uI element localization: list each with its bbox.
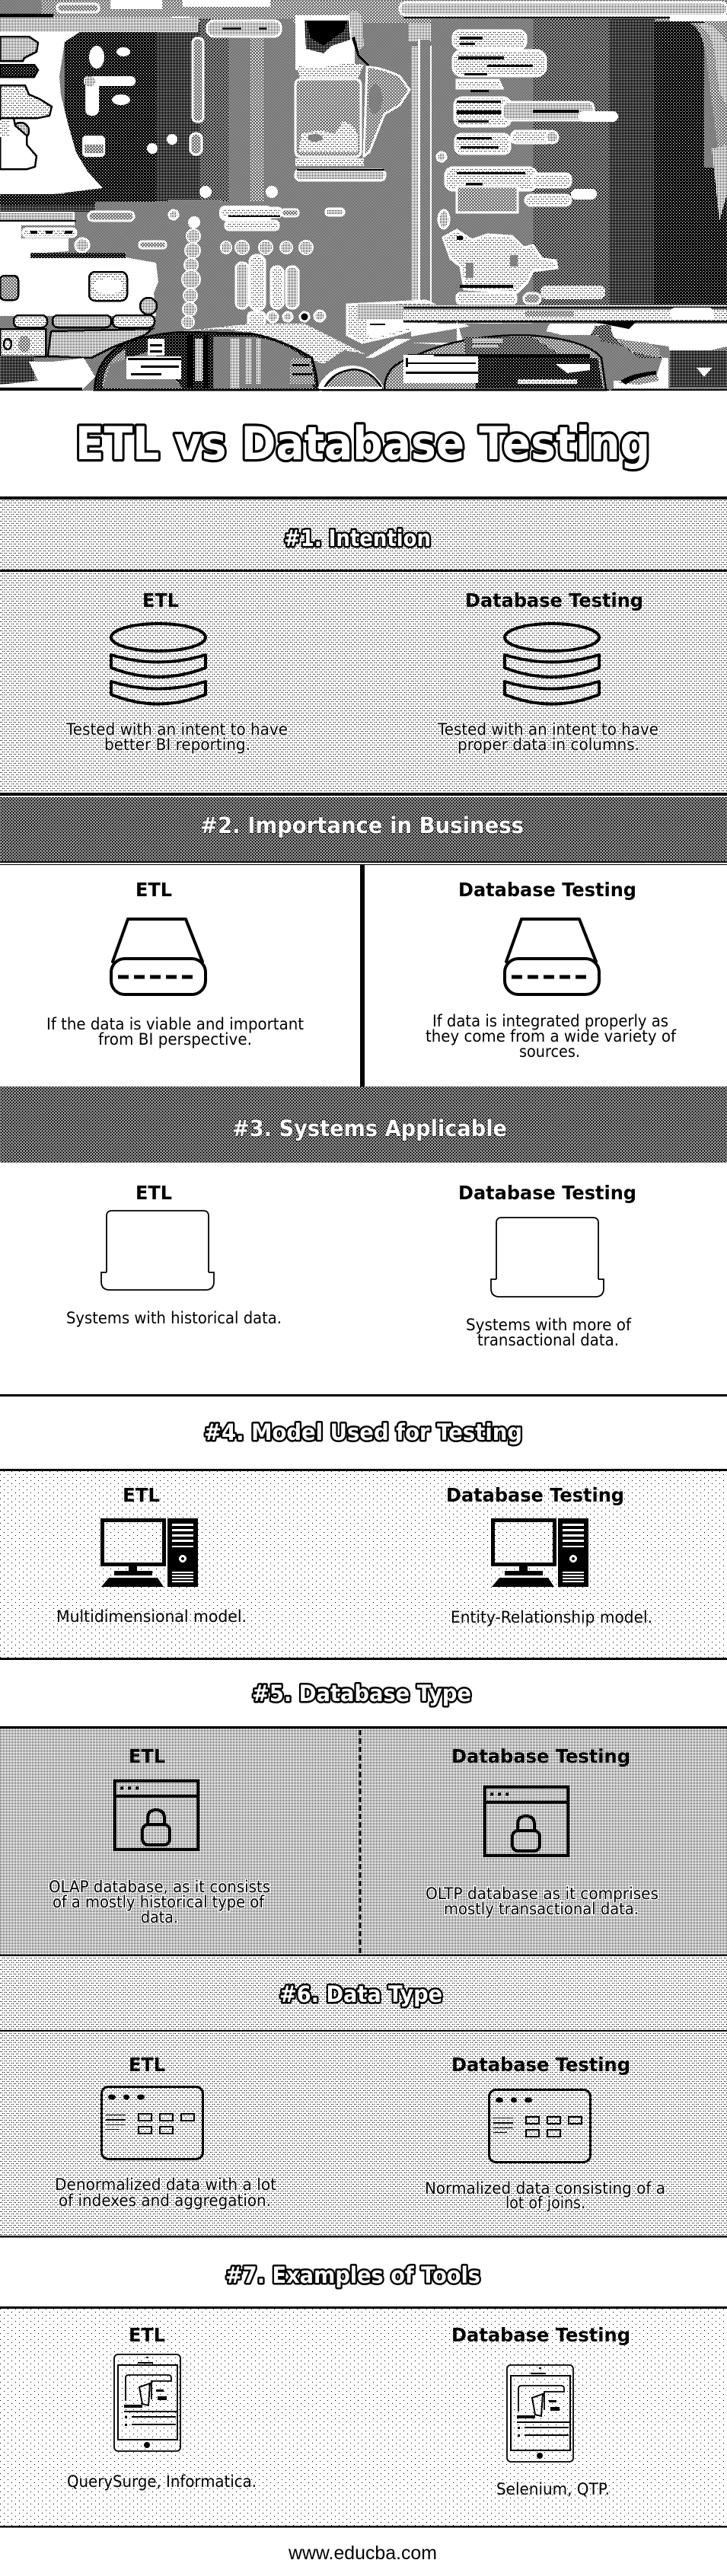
ETL column heading: ETL [129,2054,165,2076]
DB text [426,1885,658,1918]
heading: #7. Examples of Tools [225,2262,480,2288]
ETL column heading: ETL [136,879,172,901]
Database Testing column heading: Database Testing [446,1484,624,1506]
Database Testing column heading: Database Testing [451,2054,630,2076]
ETL text: If the data is viable and important [46,1015,304,1033]
DB text: Selenium, QTP. [496,2480,610,2498]
hero photo: circuit board [0,0,727,391]
DB text: Tested with an intent to have [437,720,658,739]
icon: desktop computer ETL [101,1518,198,1587]
DB text: If data is integrated properly as [432,1012,668,1030]
DB text: sources. [519,1042,580,1061]
icon: drive DB [505,919,599,994]
icon: tablet ETL [114,2354,180,2451]
Database Testing column heading: Database Testing [458,879,636,901]
footer url: www.educba.com [288,2542,437,2564]
ETL column heading: ETL [129,2324,165,2346]
icon: laptop ETL [101,1211,214,1290]
DB text [437,720,658,754]
panel: section 6 data type [0,1955,727,2236]
icon: tablet DB [507,2365,573,2462]
column divider [359,1730,361,1955]
heading: #5. Database Type [252,1681,471,1706]
heading: #4. Model Used for Testing [204,1419,522,1445]
icon: lock window ETL [115,1781,198,1850]
Database Testing column heading: Database Testing [451,1745,630,1767]
ETL text: from BI perspective. [98,1030,252,1049]
column divider [360,865,365,1087]
heading: #3. Systems Applicable [232,1116,507,1141]
heading: #1. Intention [284,525,431,551]
Database Testing column heading: Database Testing [458,1182,636,1204]
DB text: mostly transactional data. [444,1900,639,1918]
icon: database ETL [111,624,206,704]
ETL text: QuerySurge, Informatica. [67,2472,257,2491]
ETL text [49,1878,270,1926]
ETL text: OLAP database, as it consists [49,1878,270,1896]
icon: lock window DB [485,1787,568,1856]
panel: section 3 systems applicable [0,1087,727,1349]
panel: section 5 database type [0,1658,727,1955]
ETL text: Denormalized data with a lot [55,2175,276,2194]
DB text: Systems with more of [466,1316,632,1334]
ETL text: Multidimensional model. [56,1607,247,1626]
ETL column heading: ETL [136,1182,172,1204]
icon: browser ETL [102,2086,202,2159]
heading: #2. Importance in Business [200,812,524,838]
panel: section 2 importance in business [0,793,727,1087]
Database Testing column heading: Database Testing [451,2324,630,2346]
ETL text [65,720,288,754]
ETL column heading: ETL [142,589,179,611]
ETL column heading: ETL [123,1484,160,1506]
ETL text: Systems with historical data. [66,1309,282,1327]
DB text: Entity-Relationship model. [451,1608,652,1626]
panel: section 7 examples of tools [0,2236,727,2528]
icon: desktop computer DB [492,1518,588,1587]
ETL text: better BI reporting. [104,736,250,754]
heading: #6. Data Type [279,1981,442,2007]
icon: drive ETL [111,919,206,994]
ETL text: Tested with an intent to have [65,720,288,739]
ETL text: of indexes and aggregation. [59,2191,271,2210]
ETL text [46,1015,304,1049]
icon: laptop DB [491,1218,604,1297]
DB text: Normalized data consisting of a [425,2179,665,2198]
DB text [426,1012,677,1061]
DB text: proper data in columns. [458,736,639,754]
ETL text: data. [141,1908,178,1926]
Database Testing column heading: Database Testing [465,589,643,611]
ETL text [55,2175,276,2210]
icon: browser DB [489,2089,591,2163]
title: ETL vs Database Testing [75,417,650,471]
ETL column heading: ETL [129,1745,165,1767]
DB text [466,1316,632,1349]
DB text: OLTP database as it comprises [426,1885,658,1903]
DB text: transactional data. [477,1331,619,1349]
DB text [425,2179,665,2212]
panel: section 1 intention [0,496,727,793]
panel: section 4 model used for testing [0,1394,727,1658]
DB text: they come from a wide variety of [426,1027,677,1045]
ETL text: of a mostly historical type of [53,1893,265,1911]
DB text: lot of joins. [505,2194,585,2212]
icon: database DB [505,624,599,704]
